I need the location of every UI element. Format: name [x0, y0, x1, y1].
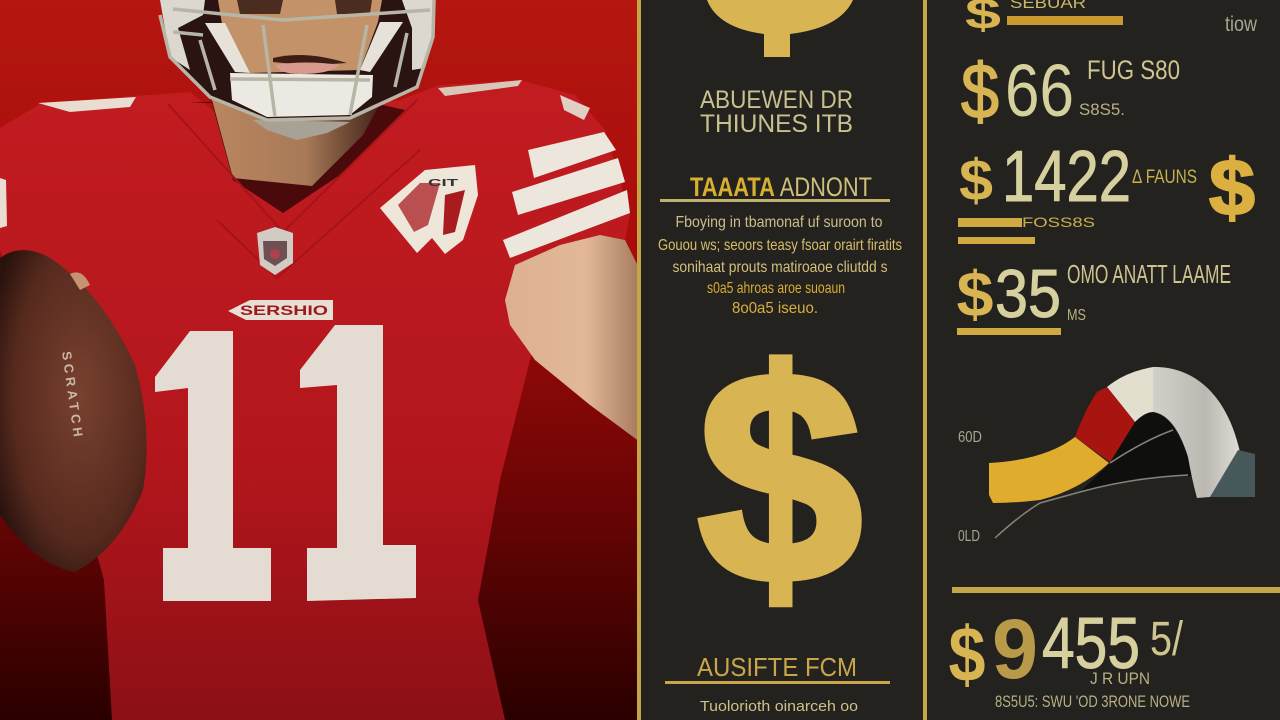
hand on ball	[70, 272, 90, 290]
mouth	[273, 55, 347, 64]
shoulder marks	[38, 97, 136, 112]
stat: 66: $	[961, 47, 999, 135]
stat: 66: FUG S80	[1087, 55, 1180, 85]
stat: 9455: 9	[992, 602, 1038, 696]
neck opening shadow	[190, 100, 405, 213]
text block: description: s0a5 ahroas aroe suoaun	[707, 280, 845, 297]
ball lettering: SCRATCH	[59, 350, 86, 438]
chin strap fringe	[253, 120, 350, 140]
text block: description: Gouou ws; seoors teasy fsoar orairt firatits	[658, 237, 902, 254]
divider line	[952, 587, 1280, 593]
stat: 1422	[958, 137, 1255, 244]
collar seams	[168, 100, 420, 278]
chart: curved arc	[958, 367, 1255, 545]
chin guard	[230, 73, 373, 117]
heading: upper text	[700, 86, 853, 138]
stat: 1422: $	[959, 148, 993, 213]
teal tail	[1210, 450, 1255, 497]
panel: dark statistics background	[640, 0, 1280, 720]
icon: top dollar sign	[707, 0, 853, 57]
heading: lower text: AUSIFTE FCM	[697, 652, 857, 682]
red segment	[1075, 387, 1135, 462]
text block: lower description: Tuolorioth oinarceh oo	[700, 698, 858, 715]
collar shield badge	[257, 227, 293, 275]
trend lines	[995, 430, 1188, 538]
stat: 1422: Δ FAUNS	[1132, 167, 1197, 188]
chest emblem: CIT	[428, 178, 458, 189]
stat: 66	[961, 47, 1180, 135]
black mound	[1080, 412, 1192, 492]
text block: description: 8o0a5 iseuo.	[732, 300, 818, 317]
jersey number 11	[155, 325, 416, 601]
stat: 9455: 5/	[1150, 613, 1184, 666]
right column	[948, 0, 1280, 711]
stat: 9455: 8S5U5: SWU 'OD 3RONE NOWE	[995, 692, 1190, 711]
stat: top: tiow	[1225, 13, 1258, 36]
helmet interior	[160, 0, 434, 120]
lips	[275, 62, 340, 74]
face	[218, 0, 382, 73]
helmet and face	[160, 0, 434, 140]
neck skin	[212, 100, 382, 186]
text block: description	[658, 214, 902, 317]
left edge stripe	[0, 178, 7, 228]
chart: curved arc: 0LD	[958, 528, 980, 545]
wordmark above number	[228, 300, 333, 320]
grey arc	[1153, 367, 1240, 498]
wordmark above number: SERSHIO	[240, 302, 328, 318]
chest emblem	[380, 165, 478, 254]
middle column	[658, 0, 902, 715]
heading: total amount: TAAATA ADNONT	[690, 172, 872, 202]
heading: upper text: ABUEWEN DR	[700, 86, 853, 114]
chart: curved arc: 60D	[958, 429, 982, 446]
white stripe left	[205, 23, 250, 73]
sleeve stripes	[503, 132, 630, 258]
stat: top	[965, 0, 1258, 39]
gold segment	[989, 437, 1109, 503]
stat: 1422: FOSS8S	[1022, 214, 1095, 230]
stat: 35	[956, 256, 1231, 335]
football	[0, 250, 147, 572]
stat: 9455: $	[948, 610, 986, 698]
icon: large dollar sign: $	[698, 309, 862, 645]
stat: 35: $	[956, 258, 994, 330]
stat: 9455	[948, 602, 1190, 711]
right arm	[505, 235, 640, 442]
stat: 66: S8S5.	[1079, 100, 1125, 119]
text block: description: sonihaat prouts matiroaoe cliutdd s	[672, 259, 888, 276]
player figure	[0, 80, 640, 720]
face mask bars	[160, 0, 434, 120]
icon: dollar sign: $	[1209, 143, 1255, 232]
divider lines	[637, 0, 927, 720]
stat: 1422: 1422	[1002, 137, 1131, 217]
eye shadows	[237, 0, 283, 14]
text block: description: Fboying in tbamonaf uf suroon to	[676, 214, 883, 231]
stat: 66: 66	[1005, 49, 1074, 132]
background: red studio backdrop	[0, 0, 640, 720]
cream segment	[1107, 367, 1153, 422]
heading: upper text: THIUNES ITB	[700, 110, 853, 138]
white stripe right	[360, 22, 403, 72]
stat: 35: 35	[995, 256, 1061, 332]
helmet white shell left	[160, 0, 205, 70]
helmet white shell right	[402, 0, 434, 70]
stat: 9455: J R UPN	[1090, 669, 1150, 688]
stat: 9455: 455	[1042, 604, 1140, 684]
jersey body	[0, 80, 630, 720]
stat: 35: MS	[1067, 307, 1086, 324]
